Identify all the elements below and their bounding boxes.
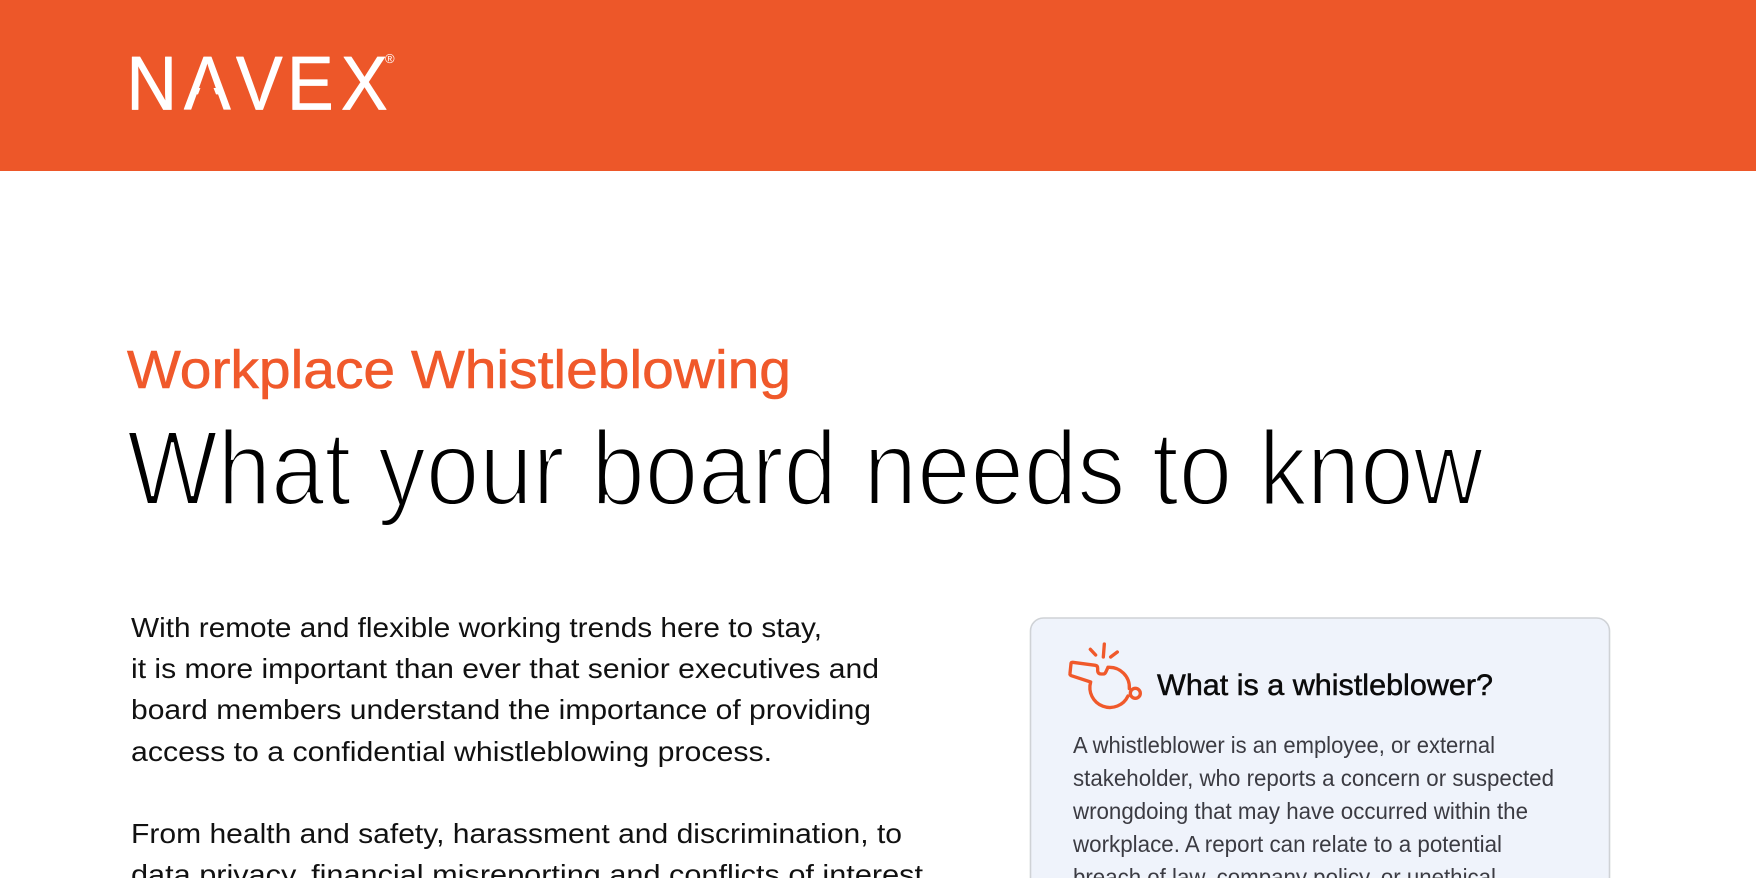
intro text block: access to a confidential whistleblowing process. <box>131 736 772 767</box>
panel body text: stakeholder, who reports a concern or suspected <box>1073 765 1554 791</box>
eyebrow heading: Workplace Whistleblowing <box>127 340 791 400</box>
second paragraph <box>131 818 923 878</box>
panel: what is a whistleblower <box>1030 618 1610 878</box>
intro text block: With remote and flexible working trends here to stay, <box>131 612 822 643</box>
header band with logo <box>0 0 1756 171</box>
icon: whistle <box>1070 644 1140 707</box>
intro text block <box>131 612 879 767</box>
logo: NAVEX: ® <box>385 51 395 66</box>
panel body text: workplace. A report can relate to a potential <box>1072 831 1502 857</box>
intro text block: it is more important than ever that senior executives and <box>131 653 879 684</box>
intro text block: board members understand the importance of providing <box>131 694 871 725</box>
main title: What your board needs to know <box>127 410 1483 528</box>
second paragraph: From health and safety, harassment and discrimination, to <box>131 818 902 849</box>
panel body text: A whistleblower is an employee, or external <box>1073 732 1495 758</box>
panel body text <box>1072 732 1554 878</box>
logo: NAVEX: NAVEX <box>127 42 388 126</box>
panel body text: wrongdoing that may have occurred within the <box>1072 798 1528 824</box>
panel heading: What is a whistleblower? <box>1157 669 1493 702</box>
